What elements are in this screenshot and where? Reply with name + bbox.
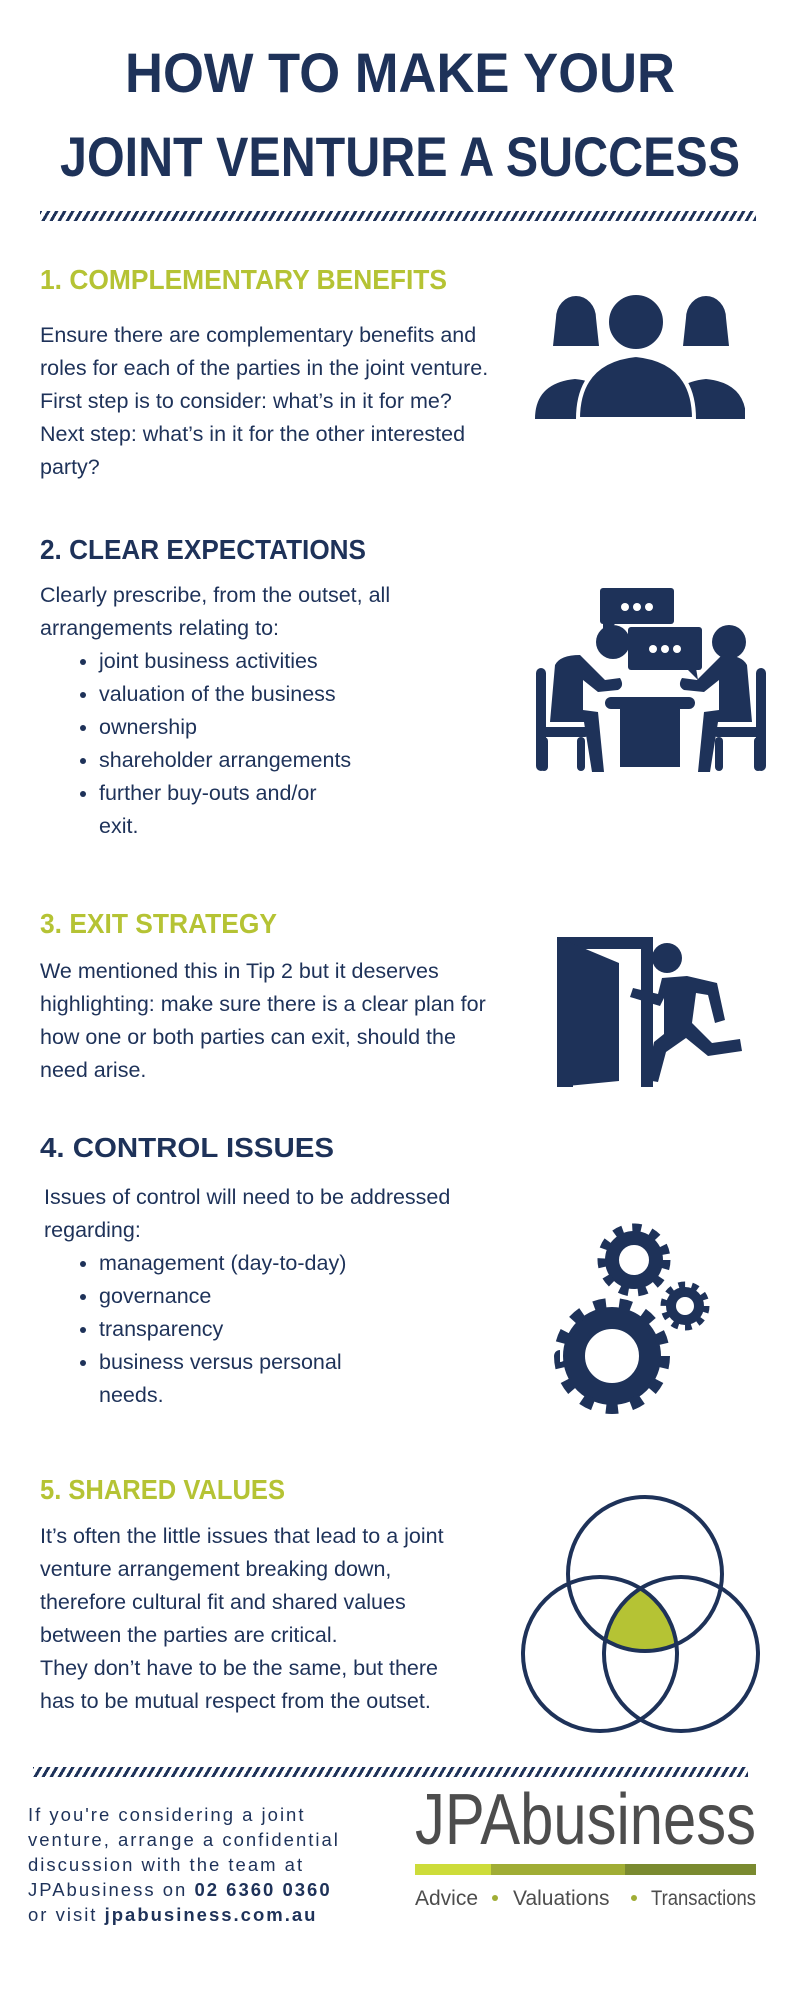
text 2: shareholder arrangements (99, 748, 351, 772)
footer text (28, 1804, 340, 1925)
text 1: Ensure there are complementary benefits and (40, 323, 476, 347)
heading 1: 1. COMPLEMENTARY BENEFITS (40, 264, 447, 295)
icon: venn (521, 1495, 760, 1733)
text 4: needs. (99, 1383, 164, 1407)
icon: people (535, 295, 745, 419)
text 5 (40, 1524, 444, 1713)
text 3: need arise. (40, 1058, 146, 1082)
text 2: valuation of the business (99, 682, 336, 706)
icon: meeting (536, 588, 766, 772)
logo (415, 1782, 756, 1910)
text 5: It’s often the little issues that lead to a joint (40, 1524, 444, 1548)
text 2: Clearly prescribe, from the outset, all (40, 583, 390, 607)
text 2: arrangements relating to: (40, 616, 279, 640)
text 1: First step is to consider: what’s in it for me? (40, 389, 452, 413)
text 1: roles for each of the parties in the joint venture. (40, 356, 488, 380)
text 2: ownership (99, 715, 197, 739)
footer text: venture, arrange a confidential (28, 1829, 340, 1850)
footer text: If you're considering a joint (28, 1804, 306, 1825)
text 4: Issues of control will need to be addressed (44, 1185, 450, 1209)
heading 3: 3. EXIT STRATEGY (40, 908, 277, 939)
text 5: between the parties are critical. (40, 1623, 338, 1647)
text 4: business versus personal (99, 1350, 342, 1374)
text 4: governance (99, 1284, 211, 1308)
logo: Valuations (513, 1887, 610, 1910)
text 5: has to be mutual respect from the outset. (40, 1689, 431, 1713)
text 3: how one or both parties can exit, should the (40, 1025, 456, 1049)
text 2: joint business activities (99, 649, 318, 673)
footer text: or visit jpabusiness.com.au (28, 1904, 317, 1925)
text 4 (44, 1185, 450, 1407)
heading 4: 4. CONTROL ISSUES (40, 1132, 334, 1163)
title: HOW TO MAKE YOUR (125, 41, 675, 104)
title (60, 41, 740, 188)
text 3 (40, 959, 486, 1082)
logo: Advice (415, 1887, 478, 1910)
heading 2: 2. CLEAR EXPECTATIONS (40, 534, 366, 565)
footer text: discussion with the team at (28, 1854, 304, 1875)
text 1 (40, 323, 488, 479)
text 5: They don’t have to be the same, but there (40, 1656, 438, 1680)
text 2 (40, 583, 390, 838)
icon: exit door (557, 937, 742, 1087)
text 5: venture arrangement breaking down, (40, 1557, 391, 1581)
text 4: regarding: (44, 1218, 141, 1242)
text 2: further buy-outs and/or (99, 781, 317, 805)
icon: gears (554, 1224, 710, 1414)
text 2: exit. (99, 814, 138, 838)
text 4: management (day-to-day) (99, 1251, 346, 1275)
text 1: Next step: what’s in it for the other interested (40, 422, 465, 446)
text 3: We mentioned this in Tip 2 but it deserves (40, 959, 439, 983)
text 3: highlighting: make sure there is a clear plan for (40, 992, 486, 1016)
text 4: transparency (99, 1317, 223, 1341)
text 5: therefore cultural fit and shared values (40, 1590, 406, 1614)
footer text: JPAbusiness on 02 6360 0360 (28, 1879, 332, 1900)
text 1: party? (40, 455, 100, 479)
